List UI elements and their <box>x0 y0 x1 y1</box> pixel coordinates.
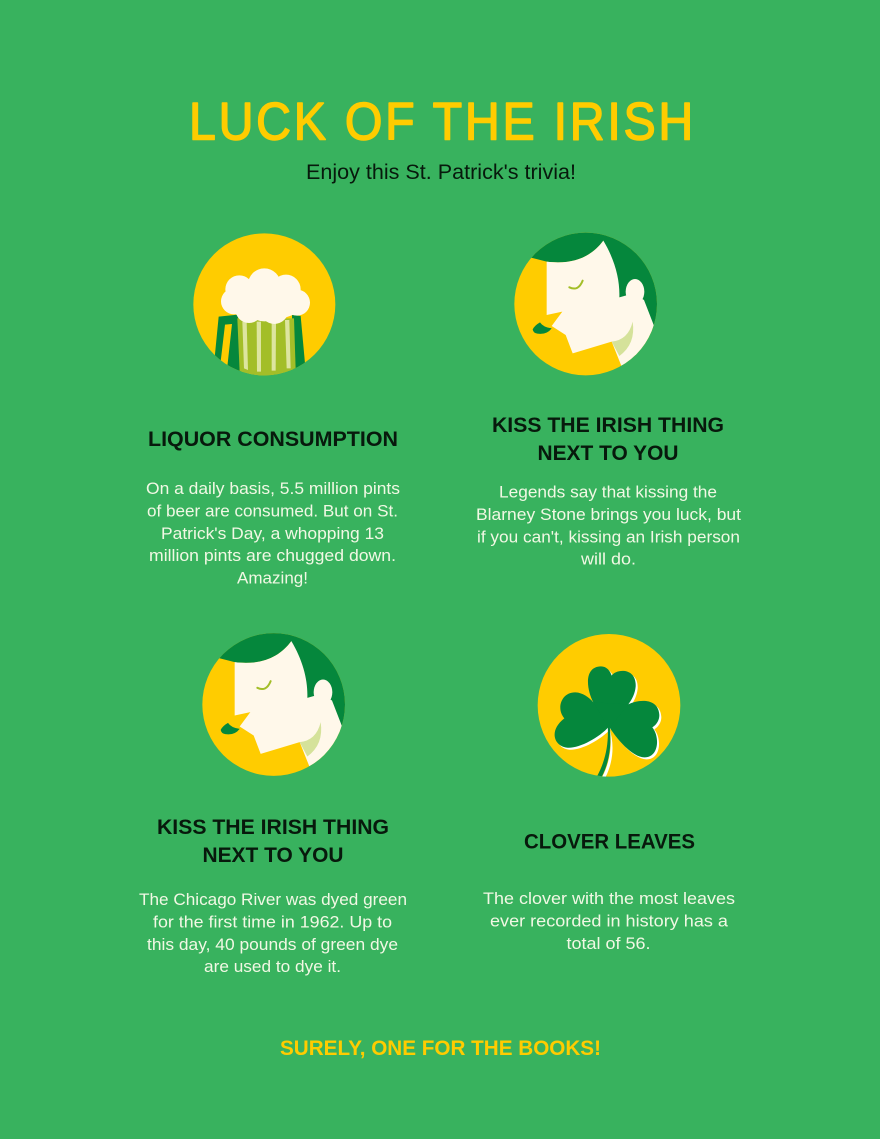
text: chicago river body: this day, 40 pounds of green dye <box>147 936 398 954</box>
heading: clover leaves: CLOVER LEAVES <box>524 830 695 854</box>
subtitle: Enjoy this St. Patrick's trivia! <box>306 161 576 184</box>
text: liquor body: Patrick's Day, a whopping 13 <box>161 525 384 543</box>
text: chicago river body: for the first time in 1962. Up to <box>153 914 392 932</box>
text: clover body: The clover with the most leaves <box>483 890 735 908</box>
heading: kiss second: KISS THE IRISH THING <box>157 815 389 839</box>
text: chicago river body: are used to dye it. <box>204 958 341 976</box>
text: liquor body <box>146 480 400 588</box>
text: clover body: total of 56. <box>566 935 650 953</box>
text: chicago river body: The Chicago River was dyed green <box>139 891 407 909</box>
icon: kissing face <box>514 232 657 376</box>
heading: kiss second: NEXT TO YOU <box>202 843 344 867</box>
heading: kiss: NEXT TO YOU <box>538 441 678 465</box>
text: clover body: ever recorded in history has a <box>490 912 729 930</box>
heading: kiss second <box>157 815 389 867</box>
text: liquor body: million pints are chugged down. <box>149 547 396 565</box>
heading: kiss: KISS THE IRISH THING <box>492 413 724 437</box>
title: LUCK OF THE IRISH <box>189 92 696 152</box>
heading: liquor consumption: LIQUOR CONSUMPTION <box>148 427 398 451</box>
text: kiss body: if you can't, kissing an Irish person <box>477 528 740 546</box>
icon: beer mug <box>193 233 335 380</box>
panel: clover leaves <box>483 634 735 953</box>
heading: kiss <box>492 413 724 465</box>
icon: kissing face second <box>202 633 345 776</box>
text: chicago river body <box>139 891 407 976</box>
panel: liquor consumption <box>146 233 400 588</box>
text: kiss body: Blarney Stone brings you luck, but <box>476 506 741 524</box>
text: clover body <box>483 890 735 953</box>
icon: shamrock <box>538 634 680 778</box>
footer callout: SURELY, ONE FOR THE BOOKS! <box>280 1036 601 1060</box>
text: kiss body: will do. <box>580 550 636 568</box>
text: liquor body: On a daily basis, 5.5 million pints <box>146 480 400 498</box>
text: kiss body: Legends say that kissing the <box>499 484 717 502</box>
panel: kiss the irish thing (top right) <box>476 220 741 568</box>
text: liquor body: of beer are consumed. But on St. <box>147 502 398 520</box>
text: liquor body: Amazing! <box>237 570 308 588</box>
text: kiss body <box>476 484 741 568</box>
panel: chicago river (bottom left) <box>139 620 407 976</box>
